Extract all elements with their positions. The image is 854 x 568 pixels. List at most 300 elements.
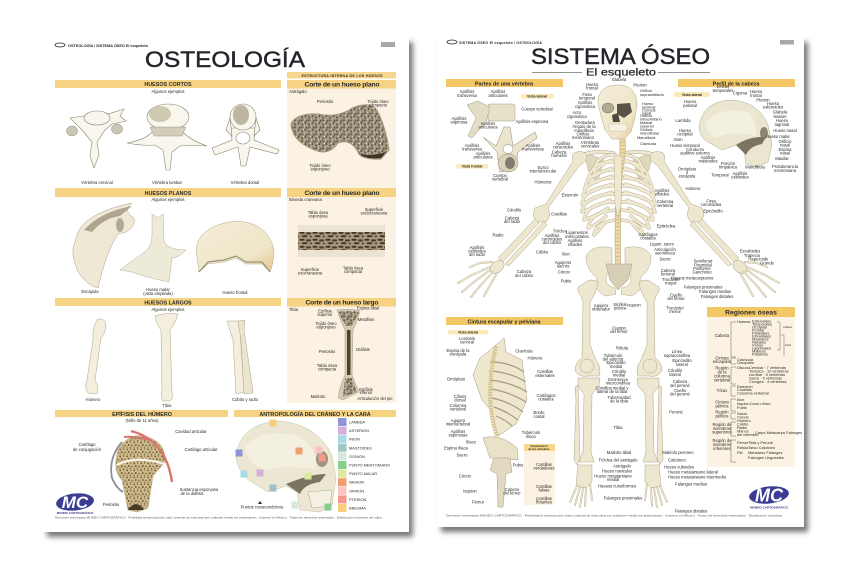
labels: skeleton upper left: del cúbito (515, 273, 534, 278)
labels: vertebra: transversa (462, 146, 482, 152)
region bones list: Esternón (737, 384, 753, 389)
labels: torso: escápula (450, 352, 467, 356)
labels: skeleton upper left: Vértebras (581, 140, 599, 145)
labels: astrágalo: compacto (369, 102, 388, 108)
labels: head profile: timpánica (719, 164, 738, 170)
labels: skeleton upper left: Pubis (561, 278, 571, 284)
labels: skeleton lower: menor (669, 309, 682, 314)
labels: skeleton upper right: femoral (661, 272, 675, 276)
region names: Región de (712, 438, 732, 443)
labels: skeleton lower: Trocánter (666, 306, 684, 310)
labels: skeleton upper left: Fosa (582, 92, 592, 97)
table: costillas: Costillas (536, 484, 552, 489)
icon: vertebra frontal (483, 127, 537, 172)
labels: skeleton upper right: Falanges proximales (684, 284, 722, 290)
panel: estructura interna: Corte de un hueso largo (306, 300, 378, 306)
legend: LAMBDA (349, 420, 365, 424)
legend: INION (349, 437, 360, 442)
legend: MASTOIDES (349, 445, 372, 450)
title: Sistema Óseo: El esqueleto (586, 68, 657, 78)
label: (vista ampliada) (143, 291, 173, 296)
labels: skeleton lower: Tubérculo (604, 353, 623, 358)
sacrum (606, 264, 632, 290)
label: Escápula (81, 289, 99, 294)
labels: skeleton upper left: del radio (469, 252, 486, 257)
panel: regiones óseas (707, 307, 802, 467)
labels: torso: costales (538, 396, 554, 402)
labels: skeleton lower: Tibia (614, 425, 623, 430)
labels: skeleton lower: de la tibia (610, 398, 629, 404)
labels: astrágalo: esponjoso (310, 166, 330, 172)
labels: vertebra: Apófisis (460, 89, 474, 94)
labels: skeleton lower: Maléolo tibial (607, 450, 631, 455)
region brackets (731, 322, 784, 462)
labels: tibia: esponjoso (316, 324, 336, 330)
label: Hueso frontal (223, 290, 248, 295)
panel: huesos largos: HUESOS LARGOS (144, 300, 192, 306)
labels: head profile: Espina (779, 147, 792, 152)
icon: vértebra dorsal (212, 104, 279, 166)
region names: Cintura (715, 356, 729, 360)
labels: torso: Húmero (528, 356, 543, 360)
labels: skeleton upper right: Pisiforme (693, 266, 711, 271)
region bones list: Cervical · 7 vértebras (749, 365, 786, 370)
labels: skeleton upper right: Semilunar (694, 258, 713, 264)
labels: bóveda: esponjosa (308, 214, 328, 218)
labels: skeleton upper right: nasal (642, 110, 651, 116)
icon: húmero (86, 319, 106, 394)
legend: PTERION (349, 497, 366, 502)
labels: skeleton upper right: Piramidal (694, 262, 712, 268)
labels: torso: Agujero (451, 418, 466, 423)
panel: huesos cortos (55, 80, 281, 185)
labels: skeleton upper left: del cúbito (543, 240, 562, 245)
labels: skeleton upper left: cervicales (581, 144, 599, 148)
labels: torso: Apófisis (451, 429, 465, 434)
labels: torso: Omóplato (447, 376, 466, 382)
labels: skeleton lower: Eminencia (608, 377, 628, 382)
labels: head profile: Hueso (767, 101, 780, 106)
labels: skeleton upper right: Cartílagos (638, 232, 658, 237)
region bones list: Esfenoides (752, 318, 771, 324)
labels: skeleton lower: obturador (592, 306, 611, 312)
region bones list: Fémur (737, 440, 749, 445)
region bones list: Coxal o Ilíaco (750, 402, 771, 406)
region bones list: Tibia y Peroné (748, 440, 773, 445)
sternum (614, 156, 622, 218)
labels: skeleton lower: Isquion (627, 302, 641, 308)
labels: astrágalo: Periostio (317, 99, 334, 104)
region names: inferiores (713, 446, 731, 451)
labels: skeleton upper left: Hueso (586, 82, 599, 87)
labels: head profile: Pterion (756, 98, 770, 102)
labels: head profile: Lambda (675, 118, 691, 123)
labels: epífisis: Cartílago articular (184, 447, 218, 452)
panel: huesos cortos: Algunos ejemplos (151, 89, 185, 94)
labels: vertebra: Apófisis espinosa (516, 119, 549, 124)
labels: skeleton upper left: Cabeza (505, 216, 520, 220)
logo: Mundo Cartográfico (right): MC (755, 486, 784, 506)
label: Cúbito y radio (232, 397, 259, 402)
labels: vertebra: articulares (488, 93, 508, 98)
labels: head profile: Glabela (773, 110, 788, 114)
labels: skeleton upper left: Cúbito (536, 250, 549, 254)
labels: tibia: Espina tibial (357, 306, 379, 310)
labels: skeleton upper left: xifoides (568, 242, 582, 247)
labels: epífisis: de la diáfisis (180, 491, 204, 496)
labels: head profile: Temporal (711, 172, 729, 178)
region bones list: Lagrimales (752, 346, 771, 350)
panel: huesos largos: Algunos ejemplos (151, 307, 185, 312)
labels: skeleton upper right: Epicóndilo (703, 208, 723, 214)
labels: vertebra: Apófisis (452, 116, 466, 121)
tag: Vista frontal (462, 164, 482, 168)
region names: pélvica (715, 414, 729, 418)
region bones list: Costillas (737, 387, 752, 392)
region bones list: Carpo Metacarpo Falanges (755, 430, 802, 435)
labels: skeleton upper right: Epitróclea (657, 224, 676, 228)
labels: skeleton upper left: Cóndilo (507, 208, 522, 212)
labels: epífisis: Sustancia esponjosa (180, 487, 219, 492)
labels: head profile: Orificio (778, 139, 792, 144)
labels: vertebra: Apófisis (476, 151, 490, 156)
labels: head profile: Nasion (773, 114, 787, 119)
legend: NASION (349, 480, 364, 485)
foot (576, 465, 592, 488)
label: puntos craneométricos (241, 501, 283, 510)
region names: columna (714, 374, 731, 378)
fine print: Derechos reservados MUNDO CARTOGRÁFICO · Prohibida la reproducción total o parcial de esta obra por cualquier medio sin autorización · Impreso en México · Todos los derechos reservados · Distribución exclusiva (446, 514, 783, 518)
labels: vertebra: vertebral (492, 176, 508, 182)
tag: Vista lateral (527, 94, 547, 98)
labels: vertebra: Apófisis (491, 89, 505, 94)
labels: skeleton upper left: mentoniano (572, 135, 595, 140)
labels: torso: Costillas (537, 369, 553, 374)
panel: cintura escapular y pelviana: Cintura escapular y pelviana (467, 320, 542, 326)
labels: vertebra: Cuerpo vertebral (521, 106, 553, 112)
labels: skeleton upper right: xifoides (655, 192, 669, 196)
femur (575, 280, 600, 376)
labels: skeleton upper left: Arco (573, 110, 582, 115)
labels: tibia: Articulación del pie (357, 396, 393, 401)
label: Vértebra lumbar (152, 180, 183, 185)
labels: skeleton lower: del fémur (667, 296, 685, 301)
panel: cintura escapular y pelviana (444, 317, 563, 507)
labels: skeleton upper right: Falanges medias (699, 289, 731, 294)
region bones list: Occipital (752, 324, 767, 330)
region names (712, 333, 732, 451)
region names: escapular (713, 359, 732, 364)
labels: head profile: parietal (683, 103, 697, 108)
half skeleton right (621, 150, 779, 507)
icon: vértebra lumbar (127, 104, 207, 170)
icon: hueso malar (120, 214, 186, 282)
fingers (458, 262, 497, 297)
labels: skeleton upper left: Cabeza (552, 150, 567, 154)
labels: skeleton upper left: Ángulo de la (572, 124, 596, 129)
icon: bóveda craneana section (298, 225, 385, 257)
region bones list: Húmero (737, 418, 751, 423)
labels: torso: Fémur (472, 500, 485, 504)
label: Hueso malar (146, 287, 170, 292)
labels: skeleton lower: Epicóndilo (606, 360, 626, 365)
labels: head profile: Líneas (717, 84, 729, 89)
panel: perfil de la cabeza: Perfil de la cabeza (713, 82, 760, 88)
labels: head profile: frontal (750, 93, 762, 98)
labels: skeleton lower: Cuerpo (612, 326, 627, 330)
labels: skeleton upper left: Agujeros (555, 260, 571, 265)
logo: Mundo Cartográfico (left): MC (62, 493, 89, 512)
patella (580, 359, 594, 373)
labels: skeleton upper right: Glabela (612, 77, 627, 82)
labels: skeleton upper left: Apófisis (556, 141, 570, 146)
panel: huesos cortos: HUESOS CORTOS (144, 82, 192, 88)
labels: skeleton upper right: Pterion (633, 82, 647, 88)
label: Vértebra dorsal (231, 180, 259, 185)
labels: skeleton lower: Cuello (674, 388, 687, 393)
region bones list: Pubis (737, 405, 747, 410)
labels: epífisis: de conjugación (73, 447, 102, 452)
region bones list: Lumbar · 5 vértebras (749, 372, 785, 377)
label: Húmero (86, 397, 101, 402)
labels: skeleton lower: lateral (669, 372, 681, 377)
labels: torso: Espina de la (446, 348, 470, 353)
logo: Mundo Cartográfico (left): MUNDO CARTOGRÁFICO (57, 510, 94, 515)
labels: skeleton upper right: escápula (679, 174, 696, 178)
labels: bóveda: compacta (344, 269, 363, 274)
labels: skeleton upper left: Apófisis (578, 100, 592, 105)
labels: torso: Espina ilíaca (444, 446, 469, 450)
labels: skeleton lower: medial (610, 364, 622, 369)
icon: cúbito y radio (227, 320, 253, 394)
region bones list: Huesos: (737, 319, 751, 324)
labels: skeleton upper right: Trapecio (744, 253, 761, 258)
labels: skeleton lower: del peroné (670, 383, 691, 388)
labels: torso: ilíaco (526, 434, 537, 439)
labels: epífisis: Periostio (103, 502, 120, 507)
labels: tibia: Tabla ósea (317, 363, 338, 368)
labels: torso: cervical (460, 340, 474, 344)
labels: skeleton upper left: coronoides (542, 236, 562, 242)
labels: head profile: auditivo externo (680, 150, 710, 156)
region bones list: Metatarso Falanges (748, 450, 782, 455)
labels: torso: Cifosis (454, 394, 466, 399)
labels: skeleton upper right: infraorbitario (640, 116, 662, 122)
skull markers (236, 420, 332, 510)
labels: skeleton lower: medial (607, 477, 619, 482)
labels: vertebra: Apófisis (526, 143, 540, 148)
labels: tibia: superior (317, 312, 333, 317)
region names: de la (717, 370, 727, 374)
legend: GONION (349, 454, 365, 459)
panel: estructura interna (287, 72, 396, 403)
labels: skeleton upper right: Húmero (686, 186, 701, 191)
labels: skeleton lower: Tróclea del astrágalo (599, 458, 638, 462)
labels: head profile: occipital (677, 132, 693, 136)
labels: bóveda: exocraneana (298, 270, 323, 276)
title: Osteología: OSTEOLOGÍA (145, 47, 305, 72)
labels: skeleton upper left: Húmeros (534, 180, 552, 184)
labels: skeleton lower: Tuberosidad (607, 395, 631, 400)
region bones list: Malares (752, 348, 766, 354)
labels: skeleton upper right: Fosa (706, 198, 716, 204)
icon: vértebra cervical (66, 109, 126, 168)
region bones list: Sacro (737, 411, 747, 416)
legend: OFRION (349, 488, 364, 493)
labels: torso: Cabeza (505, 487, 520, 492)
labels: skeleton upper left: Apófisis (545, 233, 559, 238)
panel: estructura interna: Tibia (289, 307, 299, 312)
region bones list: Pie (737, 450, 743, 455)
labels: skeleton lower: Hueso metatarsiano lateral (668, 470, 718, 474)
labels: skeleton upper left: Costillas (551, 212, 567, 216)
labels: skeleton upper left: Apófisis (470, 245, 484, 250)
labels: skeleton upper right: Apófisis (655, 188, 669, 193)
fibula (574, 385, 580, 465)
labels: skeleton upper right: Falanges distales (701, 294, 733, 299)
region bones list: Maxilares (752, 336, 769, 342)
tag: Vista lateral (682, 93, 702, 97)
labels: head profile: lagrimal (775, 122, 789, 127)
icon: hueso frontal (196, 221, 274, 272)
panel: antropología del cráneo: ANTROPOLOGÍA DEL CRÁNEO Y LA CARA (259, 410, 371, 418)
poster header line: SISTEMA ÓSEO El esqueleto / OSTEOLOGÍA (459, 40, 542, 45)
region bones list: Ilion (737, 397, 744, 402)
labels: skeleton lower: Cabeza (673, 379, 688, 384)
labels: tibia: compacta (318, 366, 337, 372)
labels: skeleton upper left: temporal (579, 96, 595, 100)
labels: head profile: Hueso (684, 99, 697, 104)
labels: skeleton upper left: frontal (586, 86, 598, 90)
icon: tibia (155, 313, 178, 401)
labels: skeleton lower: del peroné (670, 392, 691, 396)
labels: skeleton lower: lateral de la tibia (597, 389, 628, 394)
labels: epífisis: Cartílago (78, 442, 96, 447)
region bones list: Cara (785, 343, 792, 347)
table: costillas: de las vértebras (528, 447, 550, 451)
labels: head profile: Hueso temporal (670, 143, 700, 148)
region bones list: Parietales (752, 330, 769, 336)
labels: skeleton upper right: coronoidea (701, 202, 722, 207)
labels: skeleton upper left: Orificio (576, 132, 590, 136)
labels: skeleton lower (592, 292, 727, 514)
labels: torso: Ilíaco (466, 440, 477, 444)
labels: skeleton lower: Falanges medias (675, 482, 707, 486)
labels: vertebra: transversa (457, 93, 477, 98)
labels: vertebra: Apófisis (481, 121, 495, 126)
labels: skeleton upper right: supraorbitario (640, 92, 664, 97)
labels: skeleton upper left: intertubercular (530, 168, 557, 174)
panel: estructura interna: Astrágalo (289, 89, 307, 94)
labels: skeleton upper right: Sacro (660, 256, 671, 262)
logo: Mundo Cartográfico (right) (748, 484, 790, 510)
region names: superiores (712, 430, 732, 434)
labels: skeleton upper left: Cabeza (517, 269, 532, 274)
ulna (505, 221, 547, 266)
panel: huesos planos: Algunos ejemplos (151, 197, 185, 202)
labels: bóveda: endocraneana (361, 210, 388, 216)
table: costillas: Clasificación (530, 444, 548, 448)
labels: torso: Columna (450, 403, 467, 408)
labels: skeleton upper right: Ligam. sacro (650, 242, 675, 246)
labels: skeleton upper right: Grande (760, 260, 775, 266)
label: Tibia (163, 403, 172, 408)
labels: skeleton upper right: vertebral (657, 203, 673, 208)
labels: skeleton lower: Sínfisis (613, 302, 627, 307)
labels: skeleton upper right: Columna (657, 199, 674, 204)
panel: epífisis del húmero (55, 410, 228, 512)
labels: astrágalo: Tejido óseo (309, 163, 331, 168)
panel: huesos planos: HUESOS PLANOS (145, 191, 192, 197)
labels: skeleton lower: Calcáneo (668, 458, 687, 462)
labels: head profile: Porción (721, 161, 736, 166)
labels: skeleton lower: Cóndilos medial y (595, 386, 629, 390)
tag (448, 330, 488, 334)
poster header line: OSTEOLOGÍA / SISTEMA ÓSEO El esqueleto (68, 43, 149, 48)
legend: ASTERION (349, 428, 369, 433)
region names: vertebral (714, 378, 730, 382)
region bones list: Discos: (737, 365, 750, 370)
labels: head profile: estiloides (731, 174, 749, 180)
region names: miembros (713, 442, 731, 447)
labels: skeleton upper left: humeral (551, 153, 567, 158)
label: Vértebra cervical (81, 180, 113, 185)
humerus (533, 151, 587, 222)
labels: astrágalo (309, 99, 389, 172)
panel: partes de una vértebra: Partes de una vértebra (475, 82, 534, 88)
region bones list: Sacro · 5 vértebras (749, 376, 782, 380)
scapula (584, 152, 604, 184)
labels: torso: Tubérculo (522, 430, 541, 435)
panel: right poster Sistema Óseo (437, 30, 804, 527)
labels: skeleton lower: Hueso metatarsiano intermedio (668, 474, 727, 480)
title: Sistema Óseo (531, 44, 710, 78)
labels: skeleton upper left: coracoides (553, 144, 573, 150)
labels: tibia: Maléolo (311, 394, 326, 399)
region bones list: Vómer (752, 342, 764, 348)
radius (498, 219, 539, 262)
region bones list: Temporales (752, 322, 772, 326)
logo: Mundo Cartográfico (right): MUNDO CARTOGRÁFICO (750, 504, 788, 510)
labels: tibia (311, 306, 393, 401)
region bones list (737, 318, 802, 460)
panel: epífisis del húmero: (Niño de 11 años) (126, 418, 159, 423)
labels: head profile: Conducto (686, 147, 705, 152)
labels: skeleton lower: intercondílea (606, 380, 631, 386)
labels: head profile: Cigoma (733, 90, 748, 96)
labels: head profile: Apófisis (733, 171, 747, 176)
fine print: Derechos reservados MUNDO CARTOGRÁFICO · Prohibida la reproducción total o parcial de esta obra por cualquier medio sin autorización · Impreso en México · Todos los derechos reservados · Distribución exclusiva del editor (55, 516, 382, 520)
panel: partes de una vértebra (446, 79, 563, 182)
labels: epífisis (73, 429, 219, 507)
labels: skeleton lower: supracondílea (664, 353, 691, 358)
labels: skeleton upper left: sacros (557, 264, 569, 268)
labels: skeleton lower: Cóndilo (668, 368, 683, 373)
labels: skeleton upper left: Tróclea (553, 228, 568, 234)
labels: skeleton upper right: Ganchoso (692, 270, 712, 274)
labels: skeleton lower: Falanges distales (675, 508, 707, 514)
region bones list: Falanges Ungueales (748, 455, 784, 460)
labels: skeleton lower: Peroné (669, 410, 683, 414)
region bones list: Clavícula (737, 357, 754, 362)
labels: bóveda: Superficie (301, 267, 320, 272)
region names: Tórax (717, 388, 728, 393)
labels: skeleton upper right: mandibular (640, 130, 660, 136)
labels: skeleton lower: Hueso cuboides (664, 464, 694, 470)
region bones list: Torácica · 12 vértebras (749, 368, 789, 374)
icon: vertebra lateral (467, 101, 515, 138)
tibia (578, 378, 600, 462)
